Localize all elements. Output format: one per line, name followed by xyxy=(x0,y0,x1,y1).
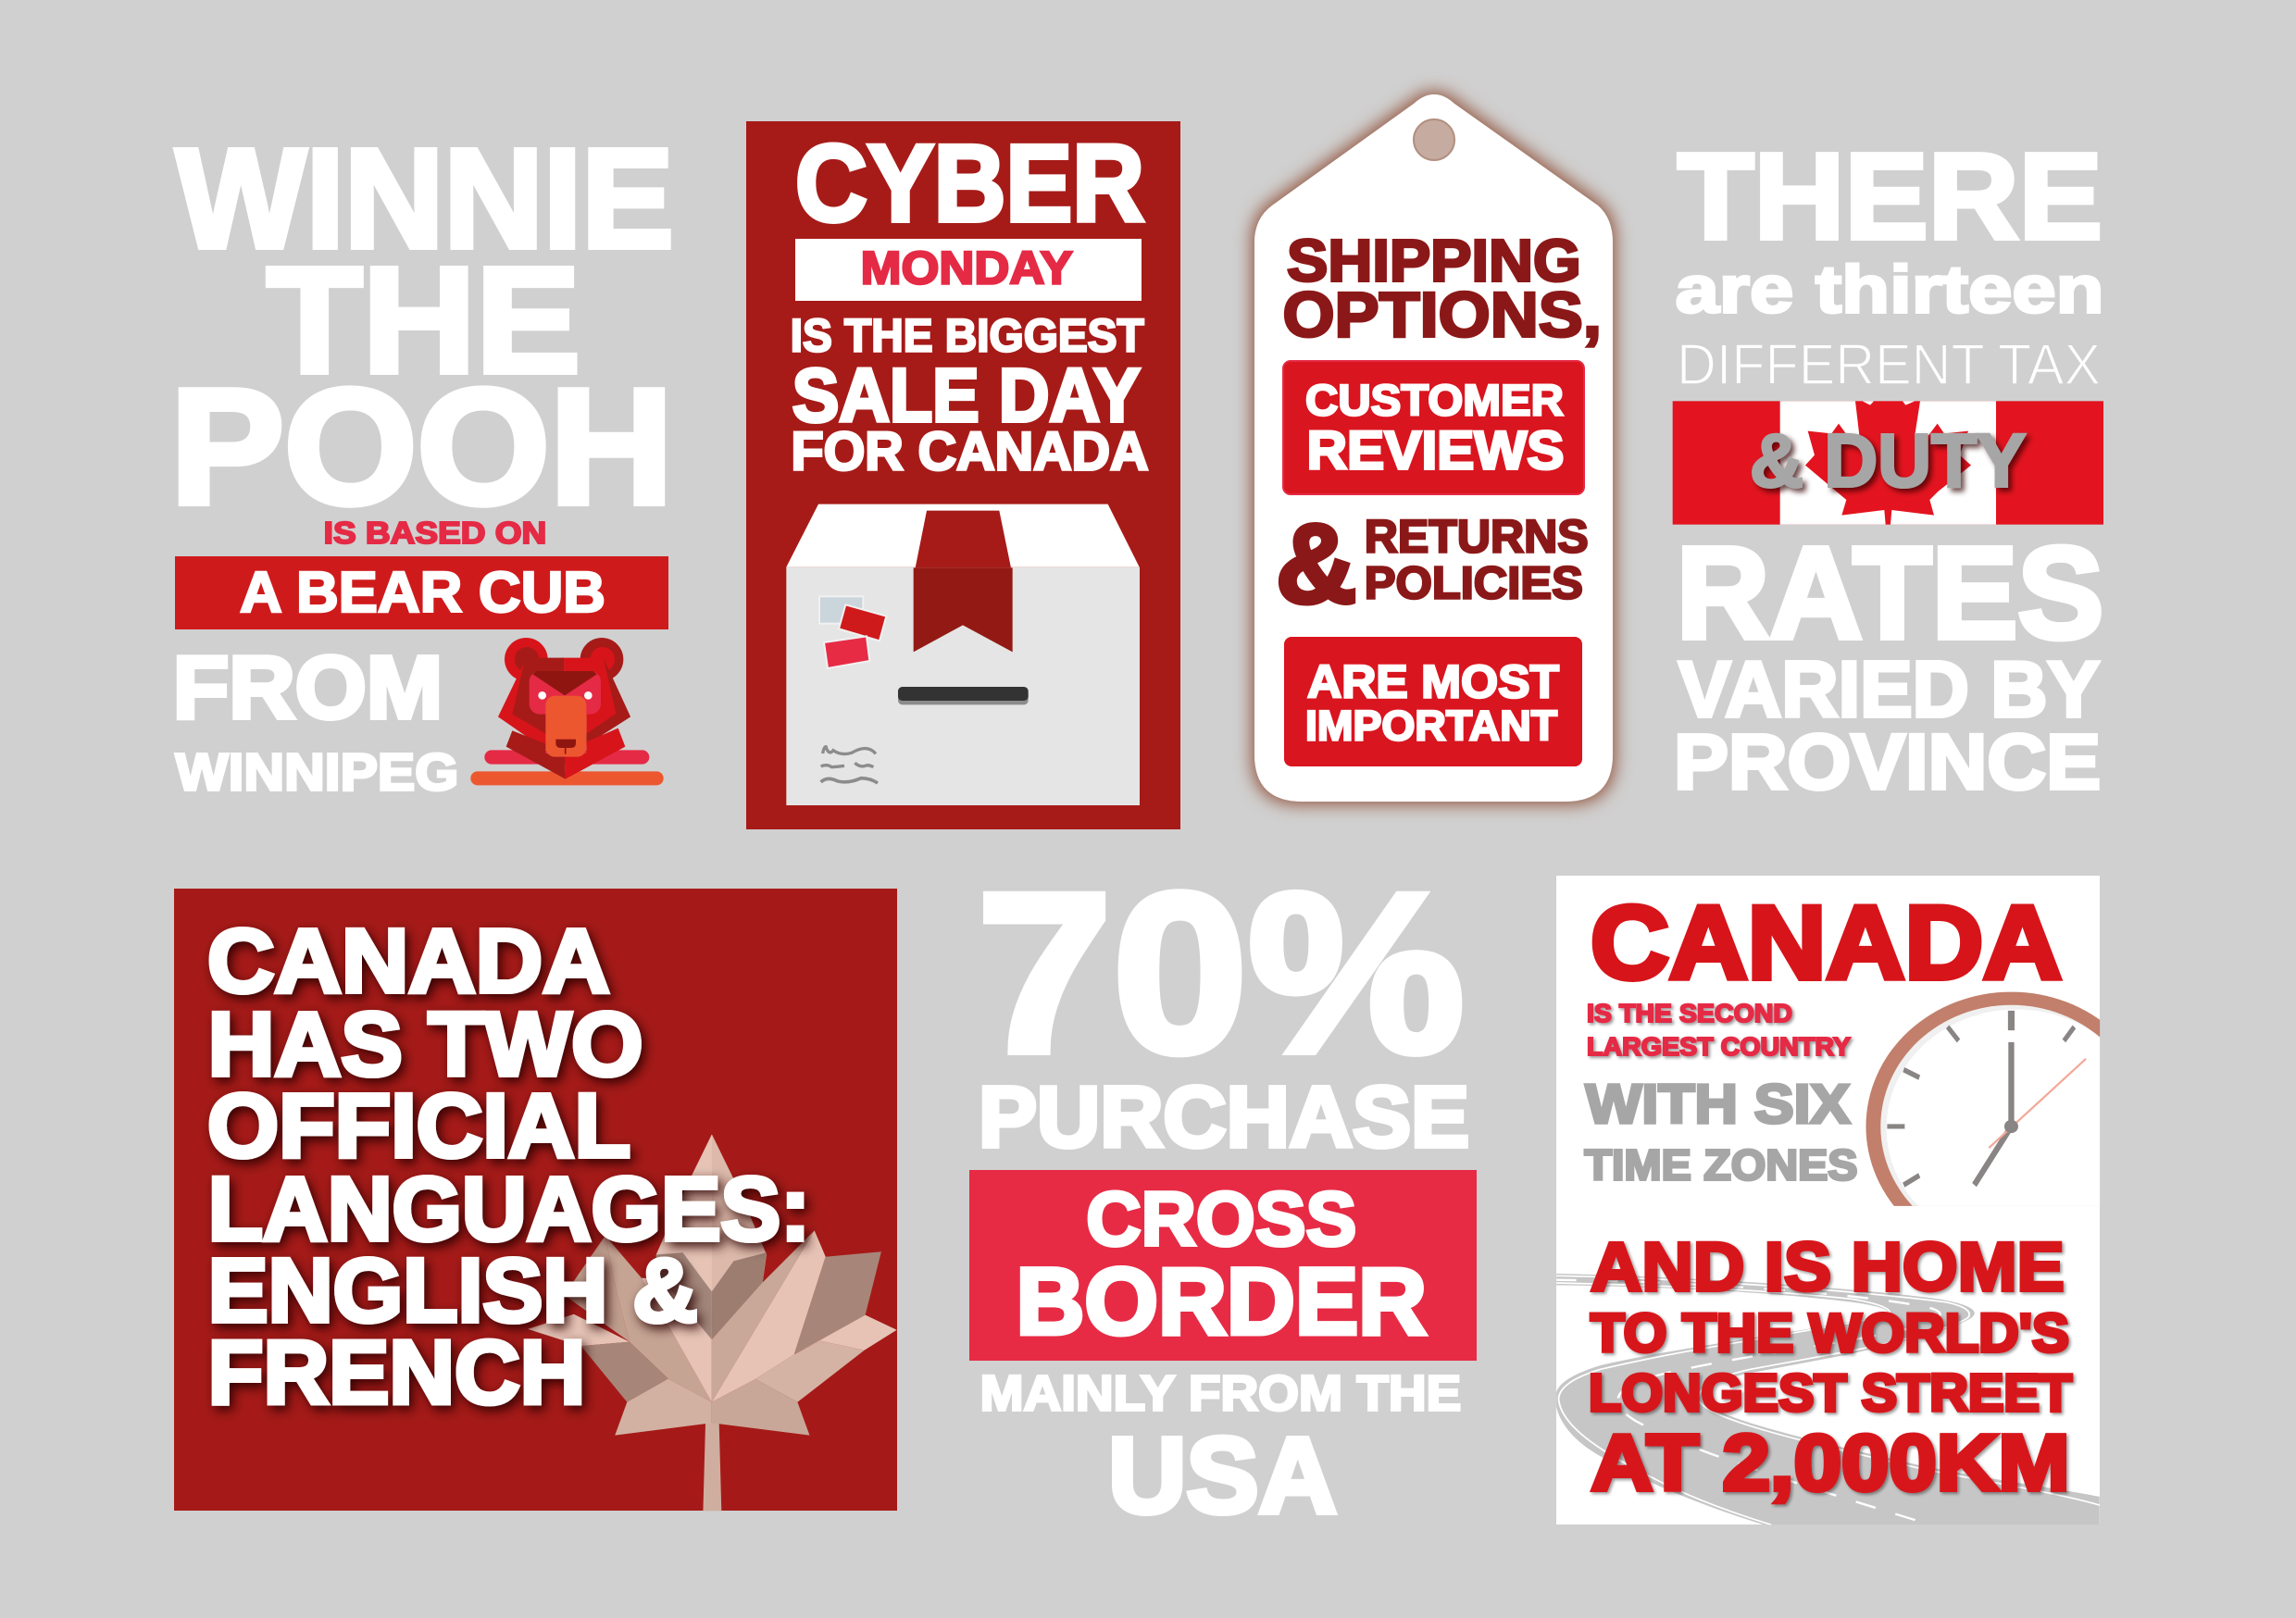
heading: THE: THE xyxy=(267,237,580,404)
panel: Cyber Monday xyxy=(746,121,1180,829)
button: customer reviews: CUSTOMER xyxy=(1305,376,1564,425)
text: is the second largest country: IS THE SECOND xyxy=(1587,999,1792,1027)
heading: WINNIE: WINNIE xyxy=(176,120,674,278)
heading: Cyber: CYBER xyxy=(795,122,1144,244)
text: for Canada: FOR CANADA xyxy=(791,422,1148,481)
panel: official languages xyxy=(174,889,897,1511)
tag hole xyxy=(1414,119,1454,160)
text: Winnipeg: WINNIPEG xyxy=(176,744,458,802)
panel: Canada size, time zones, street xyxy=(1555,876,2156,1527)
heading: Canada: CANADA xyxy=(1591,885,2062,1001)
panel: shipping tag xyxy=(1254,94,1613,802)
text: with six time zones: TIME ZONES xyxy=(1585,1140,1857,1189)
icon: Canadian flag xyxy=(1673,401,2103,525)
text: policies: POLICIES xyxy=(1365,559,1583,609)
banner: cross border xyxy=(969,1170,1477,1361)
heading: Canada has two official languages xyxy=(207,911,810,1423)
text: different tax: DIFFERENT TAX xyxy=(1677,333,2101,397)
banner: cross border: BORDER xyxy=(1017,1249,1427,1354)
text: is the second largest country: LARGEST COUNTRY xyxy=(1587,1032,1851,1061)
ampersand: & xyxy=(1276,501,1357,627)
text: and duty: & DUTY xyxy=(1750,418,2026,504)
banner: a bear cub: A BEAR CUB xyxy=(240,561,605,625)
heading: Canada has two official languages: HAS TWO xyxy=(208,994,643,1094)
text: with six time zones xyxy=(1585,1074,1857,1189)
panel: tax and duty xyxy=(1673,128,2104,805)
text: is the biggest: IS THE BIGGEST xyxy=(791,310,1144,362)
button: customer reviews xyxy=(1283,361,1584,494)
text: USA: USA xyxy=(1108,1415,1337,1536)
text: with six time zones: WITH SIX xyxy=(1586,1074,1850,1135)
button: customer reviews: REVIEWS xyxy=(1307,420,1565,481)
tag shape xyxy=(1254,94,1613,802)
text: and is home to the world's longest street at 2,000km: AND IS HOME xyxy=(1591,1228,2065,1305)
text: are thirteen: are thirteen xyxy=(1676,254,2104,328)
text: purchase: PURCHASE xyxy=(979,1068,1469,1164)
heading: Canada has two official languages: OFFICIAL xyxy=(207,1076,630,1176)
panel: Winnie the Pooh xyxy=(170,120,674,802)
icon: parcel box xyxy=(786,504,1140,805)
text: province: PROVINCE xyxy=(1674,718,2101,805)
heading: Canada has two official languages: FRENCH xyxy=(208,1322,585,1423)
banner: Monday xyxy=(795,239,1142,301)
text: and is home to the world's longest street at 2,000km: LONGEST STREET xyxy=(1589,1364,2072,1423)
button: are most important: IMPORTANT xyxy=(1305,703,1557,750)
banner: cross border: CROSS xyxy=(1086,1176,1356,1262)
heading: there: THERE xyxy=(1678,128,2103,265)
heading: Canada has two official languages: ENGLISH & xyxy=(208,1240,697,1340)
text: sale day: SALE DAY xyxy=(792,354,1141,438)
text: shipping: SHIPPING xyxy=(1287,228,1581,294)
heading: POOH: POOH xyxy=(170,355,673,539)
stat: 70%: 70% xyxy=(977,846,1465,1101)
text: is based on: IS BASED ON xyxy=(324,517,546,551)
text: is the second largest country xyxy=(1587,999,1851,1061)
text: and is home to the world's longest street at 2,000km xyxy=(1589,1228,2072,1507)
icon: faceted maple leaf xyxy=(528,1135,897,1511)
button: are most important: ARE MOST xyxy=(1307,656,1559,708)
icon: clock xyxy=(1866,992,2100,1206)
text: mainly from the: MAINLY FROM THE xyxy=(980,1366,1461,1422)
icon: winding road xyxy=(1555,1274,2102,1527)
text: options: OPTIONS, xyxy=(1283,280,1602,350)
banner: Monday: MONDAY xyxy=(861,243,1073,294)
icon: bear xyxy=(470,638,664,785)
text: from: FROM xyxy=(173,639,443,737)
banner: a bear cub xyxy=(175,556,668,629)
heading: Canada has two official languages: LANGUAGES: xyxy=(208,1159,810,1259)
panel: 70 percent xyxy=(969,846,1477,1536)
text: varied by: VARIED BY xyxy=(1678,645,2100,734)
text: returns: RETURNS xyxy=(1365,511,1589,563)
heading: rates: RATES xyxy=(1677,519,2103,666)
text: and is home to the world's longest street at 2,000km: TO THE WORLD'S xyxy=(1591,1303,2069,1363)
button: are most important xyxy=(1284,637,1582,766)
text: and is home to the world's longest street at 2,000km: AT 2,000KM xyxy=(1591,1418,2070,1507)
heading: Canada has two official languages: CANADA xyxy=(207,911,609,1011)
